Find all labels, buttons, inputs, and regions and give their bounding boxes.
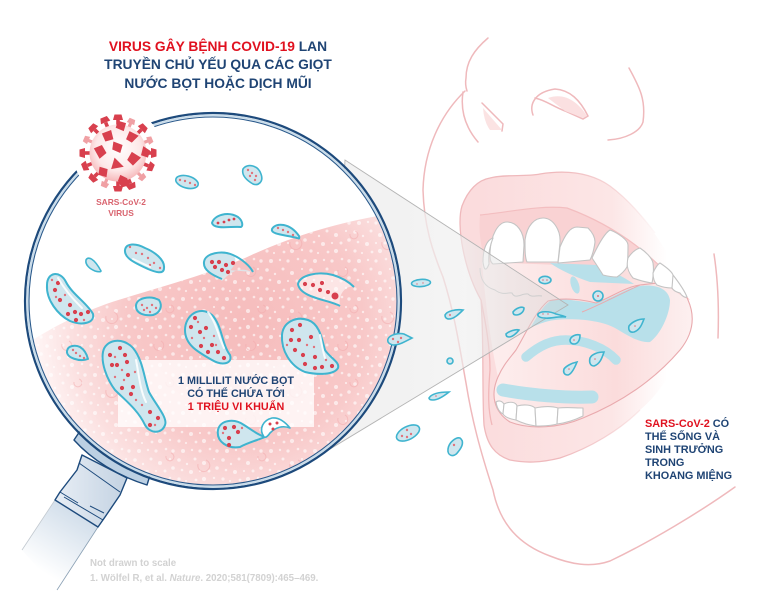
tissue surface <box>34 216 396 484</box>
droplet j <box>513 307 524 315</box>
droplet 11 <box>185 311 231 363</box>
footnote: Not drawn to scale <box>90 558 177 569</box>
droplet b <box>445 310 463 319</box>
droplet 9 <box>204 253 253 281</box>
callout box <box>118 360 314 427</box>
virus label: SARS-CoV-2 <box>96 197 146 207</box>
lip outer edge <box>460 172 655 462</box>
droplet d <box>447 358 453 364</box>
droplet 13 <box>67 346 88 360</box>
title: VIRUS GÂY BỆNH COVID-19 LAN <box>109 37 327 54</box>
upper gum <box>479 207 690 300</box>
droplet 1 <box>174 173 200 191</box>
virus surface proteins <box>94 121 150 188</box>
zoom cone <box>330 160 568 449</box>
droplet k <box>538 312 566 318</box>
collar <box>74 428 151 485</box>
mouth caption line 4: TRONG <box>645 457 684 469</box>
droplet n <box>570 335 580 344</box>
droplet h <box>539 276 551 284</box>
magnifier lens <box>25 113 401 500</box>
lens rim <box>25 113 401 489</box>
title line 3: NƯỚC BỌT HOẶC DỊCH MŨI <box>124 74 312 91</box>
droplets in flight <box>388 276 644 456</box>
virus label line 2: VIRUS <box>108 208 134 218</box>
mouth caption line 5: KHOANG MIỆNG <box>645 469 732 482</box>
face outline <box>423 38 735 565</box>
virus spikes <box>80 114 156 192</box>
droplet o <box>590 352 604 366</box>
upper teeth <box>483 218 687 297</box>
droplet m <box>629 319 644 332</box>
droplet a <box>411 279 431 287</box>
virus icon <box>73 108 163 198</box>
droplets inside lens <box>47 166 354 447</box>
mouth interior <box>482 262 692 427</box>
callout text line 3: 1 TRIỆU VI KHUẨN <box>188 400 284 413</box>
droplet p <box>564 362 577 375</box>
lower teeth <box>496 401 583 426</box>
saliva patches <box>503 263 670 397</box>
title line 2: TRUYỀN CHỦ YẾU QUA CÁC GIỌT <box>104 55 332 72</box>
droplet e <box>429 392 449 400</box>
molars <box>480 268 542 296</box>
callout text line 2: CÓ THỂ CHỨA TỚI <box>187 387 285 400</box>
tongue outline <box>498 283 672 377</box>
droplet 12 <box>282 319 338 374</box>
droplet c <box>388 334 412 345</box>
droplet 7 <box>47 274 93 323</box>
droplet 14 <box>103 341 165 432</box>
droplet 15 <box>218 421 265 447</box>
droplet l <box>506 330 519 337</box>
droplet 16 <box>262 418 290 437</box>
droplet 10 <box>298 273 354 306</box>
reference: 1. Wölfel R, et al. Nature. 2020;581(7809):465–469. <box>90 573 319 584</box>
magnifier handle <box>22 428 151 590</box>
lips <box>460 172 694 462</box>
grip <box>55 455 127 527</box>
mouth caption line 2: THỂ SỐNG VÀ <box>645 429 720 443</box>
rod <box>22 500 98 590</box>
droplet g <box>448 438 462 456</box>
droplet 4 <box>272 225 299 238</box>
droplet 2 <box>243 166 262 185</box>
droplet 3 <box>212 214 242 227</box>
droplet 5 <box>125 244 164 272</box>
droplet f <box>394 422 422 444</box>
callout text: 1 MILLILIT NƯỚC BỌT <box>178 374 294 387</box>
mouth caption line 3: SINH TRƯỞNG <box>645 443 723 456</box>
droplet 8 <box>136 298 161 315</box>
mouth <box>460 172 694 462</box>
droplet i <box>593 291 603 301</box>
droplet 6 <box>86 258 101 272</box>
mouth caption: SARS-CoV-2 CÓ <box>645 417 730 430</box>
